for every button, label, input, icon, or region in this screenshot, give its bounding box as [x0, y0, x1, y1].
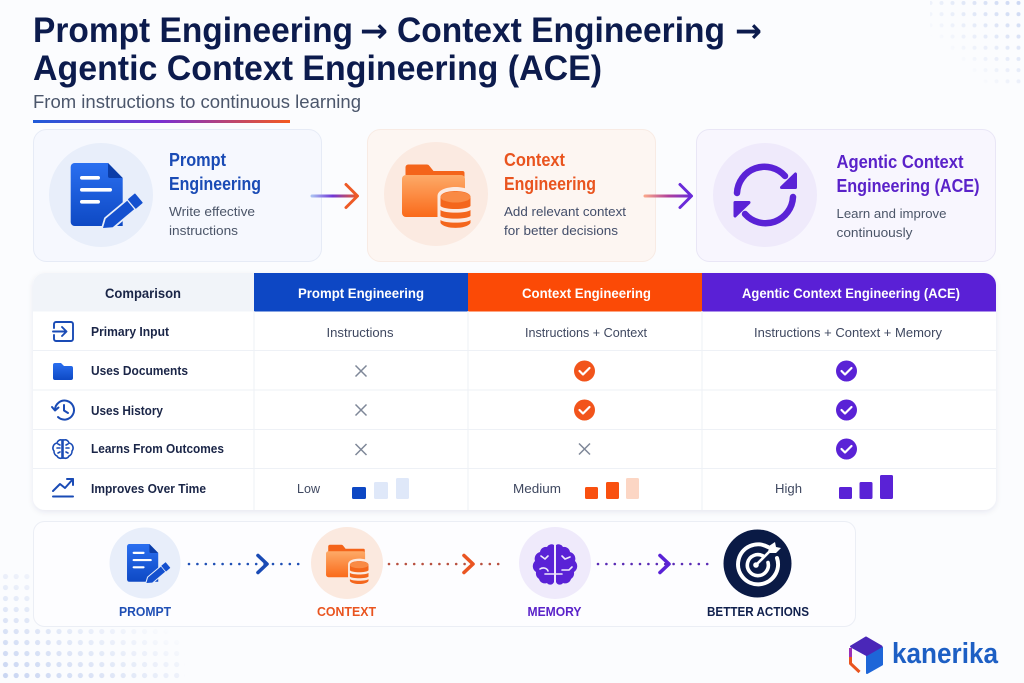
subtitle: From instructions to continuous learning — [33, 92, 361, 112]
row: uses documents — [53, 360, 857, 382]
row: primary input — [53, 322, 943, 341]
context card description: for better decisions — [504, 223, 619, 238]
step: better actions: BETTER ACTIONS — [707, 604, 809, 619]
icon: folder — [53, 363, 73, 380]
table header row: Context Engineering — [522, 286, 651, 301]
row: uses history: Uses History — [91, 404, 163, 418]
purple check — [836, 400, 857, 420]
step: prompt — [110, 528, 180, 619]
cross mark — [356, 444, 366, 455]
panel: flow strip — [34, 522, 856, 626]
row: primary input: Instructions — [326, 326, 394, 340]
comparison table — [33, 273, 996, 510]
icon: folder with database — [402, 164, 474, 230]
row: improves over time: Medium — [513, 482, 561, 496]
table header row — [33, 273, 996, 312]
step: memory: MEMORY — [528, 604, 582, 619]
ACE card heading: Agentic Context — [836, 152, 964, 172]
ACE card description: Learn and improve — [836, 206, 946, 221]
context card heading: Engineering — [504, 174, 596, 194]
prompt card heading: Prompt — [169, 150, 226, 170]
icon: document with pencil small — [127, 544, 170, 583]
row: learns from outcomes — [53, 438, 857, 460]
connector: context to memory — [389, 556, 500, 572]
icon: history clock — [52, 401, 74, 420]
icon: brain filled — [533, 544, 577, 585]
icon: input arrow — [53, 322, 73, 341]
orange check — [574, 360, 595, 382]
purple check — [836, 360, 857, 382]
decorative dots: bottom left — [3, 574, 179, 678]
step: better actions — [707, 530, 809, 619]
context card description: Add relevant context — [504, 204, 626, 219]
decorative dots: top right — [930, 1, 1020, 84]
subtitle gradient rule — [33, 120, 290, 123]
icon: trend line — [53, 479, 73, 496]
prompt card description: Write effective — [169, 204, 255, 219]
icon: brain outline — [53, 440, 73, 458]
ACE card description — [836, 206, 946, 240]
panel: agentic context engineering card — [696, 130, 996, 262]
cross mark — [579, 444, 590, 454]
row: uses documents: Uses Documents — [91, 364, 188, 378]
title: Agentic Context Engineering (ACE) — [33, 49, 602, 88]
ACE card heading — [836, 152, 980, 196]
title: → — [735, 11, 762, 50]
connector: memory to better actions — [598, 556, 715, 572]
prompt card description — [169, 204, 255, 238]
prompt card heading — [169, 150, 261, 194]
context card heading: Context — [504, 150, 565, 170]
cross mark — [356, 366, 366, 376]
bars: medium — [585, 478, 639, 499]
table header row: Prompt Engineering — [298, 286, 424, 301]
bars: low — [352, 478, 409, 499]
row: uses history — [52, 400, 857, 420]
step: prompt: PROMPT — [119, 604, 171, 619]
step: context: CONTEXT — [317, 604, 376, 619]
panel: prompt engineering card — [34, 130, 322, 262]
row: improves over time: Improves Over Time — [91, 482, 206, 496]
row: improves over time: Low — [297, 482, 321, 496]
title: Context Engineering — [397, 11, 725, 50]
row: improves over time — [53, 475, 893, 499]
context card heading — [504, 150, 596, 194]
logo: kanerika — [850, 638, 999, 673]
panel: context engineering card — [368, 130, 656, 262]
row: learns from outcomes: Learns From Outcomes — [91, 442, 224, 456]
ACE card heading: Engineering (ACE) — [836, 176, 980, 196]
arrow: context to ACE — [645, 184, 692, 208]
row: improves over time: High — [775, 482, 802, 496]
icon: folder with database small — [326, 545, 370, 585]
prompt card heading: Engineering — [169, 174, 261, 194]
bars: high — [839, 475, 893, 499]
context card description — [504, 204, 626, 238]
row: primary input: Instructions + Context — [525, 326, 648, 340]
title — [33, 11, 762, 88]
arrow: prompt to context — [312, 184, 358, 208]
orange check — [574, 400, 595, 420]
icon: hexagon cube — [850, 638, 882, 673]
step: context — [311, 527, 383, 619]
ACE card description: continuously — [836, 225, 913, 240]
connector: prompt to context — [189, 556, 302, 572]
icon: target with arrow — [738, 542, 781, 584]
table header row: Agentic Context Engineering (ACE) — [742, 286, 960, 301]
row: primary input: Primary Input — [91, 325, 170, 339]
cross mark — [356, 404, 366, 416]
logo: kanerika: kanerika — [892, 638, 999, 670]
table header row: Comparison — [105, 286, 181, 301]
title: → — [360, 11, 388, 50]
icon: document with pencil — [71, 163, 142, 228]
title: Prompt Engineering — [33, 11, 353, 50]
icon: refresh cycle — [735, 167, 796, 223]
purple check — [836, 438, 857, 460]
row: primary input: Instructions + Context + Memory — [754, 326, 943, 340]
prompt card description: instructions — [169, 223, 239, 238]
step: memory — [519, 527, 591, 619]
